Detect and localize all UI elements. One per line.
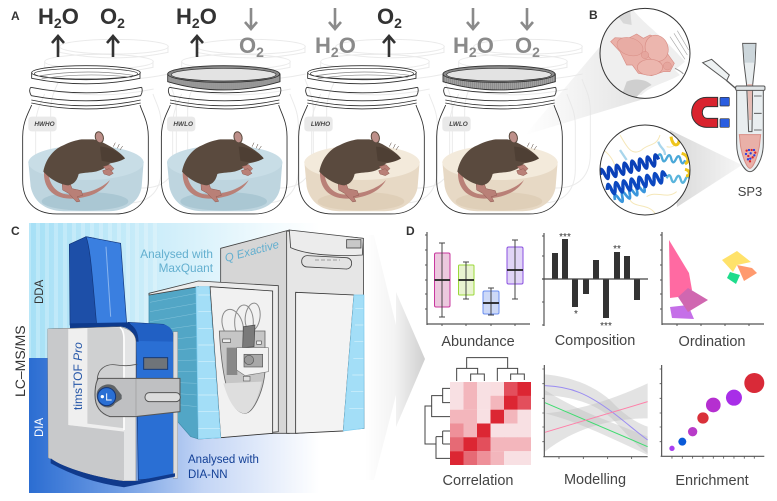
- panel label B: B: [589, 8, 598, 22]
- icon: protein structure lens: [599, 125, 690, 215]
- panel label D: D: [406, 224, 415, 238]
- gas labels: jar 3: [315, 4, 402, 60]
- gas labels: jar 1: 2: [117, 15, 125, 31]
- label: Ordination: Ordination: [679, 334, 745, 350]
- jar: HWLO: [161, 66, 287, 214]
- panel C: DDA background: [29, 223, 319, 358]
- chart: composition bars: **: [613, 244, 621, 255]
- jar: HWLO: HWLO: [173, 121, 193, 128]
- panel label A: A: [11, 9, 20, 23]
- label: Composition: Composition: [555, 333, 635, 349]
- chart: enrichment bubbles: [660, 365, 764, 459]
- gas labels: jar 4: 2: [532, 44, 540, 60]
- text: analysed with DIA-NN: [188, 454, 259, 481]
- gas labels: jar 3: H: [315, 33, 331, 58]
- label: LC-MS/MS: LC–MS/MS: [12, 325, 28, 397]
- chart: composition bars: *: [574, 309, 578, 320]
- gas labels: jar 1: H: [38, 4, 54, 29]
- jar: LWHO: [299, 66, 424, 214]
- instrument: Q Exactive: [149, 230, 364, 439]
- gas labels: jar 2: H: [176, 4, 192, 29]
- gas labels: jar 2: 2: [192, 15, 200, 31]
- gas labels: jar 3: O: [377, 4, 394, 29]
- jar: LWLO: [437, 66, 562, 214]
- gas labels: jar 3: O: [339, 33, 356, 58]
- gas labels: jar 4: H: [453, 33, 469, 58]
- text: analysed with MaxQuant: [140, 247, 214, 275]
- panel C: DIA background: [29, 358, 319, 493]
- gas labels: jar 1: O: [62, 4, 79, 29]
- icon: brain in mouse head: [598, 8, 690, 100]
- label: Q Exactive: Q Exactive: [224, 239, 280, 265]
- chart: composition bars: ***: [559, 232, 571, 243]
- chart: composition bars: [542, 232, 648, 332]
- gas labels: jar 4: O: [477, 33, 494, 58]
- chart: composition bars: ***: [600, 321, 612, 332]
- chart: correlation heatmap: [425, 358, 531, 465]
- icon: magnet: [692, 97, 729, 127]
- gas labels: jar 4: O: [515, 33, 532, 58]
- gas labels: jar 3: 2: [331, 44, 339, 60]
- gas labels: jar 2: O: [239, 33, 256, 58]
- label: SP3: SP3: [738, 184, 762, 199]
- text: analysed with MaxQuant: Analysed with: [140, 247, 213, 261]
- gas labels: jar 4: [453, 8, 540, 60]
- label: Modelling: Modelling: [564, 472, 626, 488]
- chart: ordination hulls: [660, 232, 764, 326]
- text: analysed with MaxQuant: MaxQuant: [159, 261, 214, 275]
- jar: HWHO: HWHO: [34, 121, 55, 128]
- chart: modelling trend lines: [542, 365, 648, 459]
- label: timsTOF Pro: timsTOF Pro: [71, 342, 85, 410]
- arrow: wedge from jars to brain: [525, 43, 647, 135]
- panel A: ghost jars in the background: [36, 39, 590, 203]
- gas labels: jar 1: 2: [54, 15, 62, 31]
- gas labels: jar 4: 2: [469, 44, 477, 60]
- gas labels: jar 2: O: [200, 4, 217, 29]
- jar: LWLO: LWLO: [449, 121, 468, 128]
- panel label C: C: [11, 224, 20, 238]
- arrow: wedge from instruments to analysis: [360, 235, 425, 480]
- instrument: timsTOF Pro: [48, 237, 180, 487]
- label: Abundance: Abundance: [441, 334, 515, 350]
- jar: LWHO: LWHO: [311, 121, 330, 128]
- text: analysed with DIA-NN: Analysed with: [188, 454, 259, 466]
- arrow: wedge from protein lens to tube: [670, 130, 742, 207]
- label: Correlation: Correlation: [443, 473, 513, 489]
- chart: abundance box plot: [425, 232, 530, 326]
- gas labels: jar 1: [38, 4, 125, 57]
- label: DIA: DIA: [34, 418, 46, 437]
- gas labels: jar 2: [176, 4, 264, 60]
- text: analysed with DIA-NN: DIA-NN: [188, 469, 228, 481]
- gas labels: jar 3: 2: [394, 15, 402, 31]
- icon: SP3 tube and pipette: [703, 43, 765, 172]
- gas labels: jar 1: O: [100, 4, 117, 29]
- gas labels: jar 2: 2: [256, 44, 264, 60]
- label: Enrichment: Enrichment: [675, 473, 749, 489]
- label: DDA: DDA: [34, 279, 46, 304]
- jar: HWHO: [23, 66, 148, 214]
